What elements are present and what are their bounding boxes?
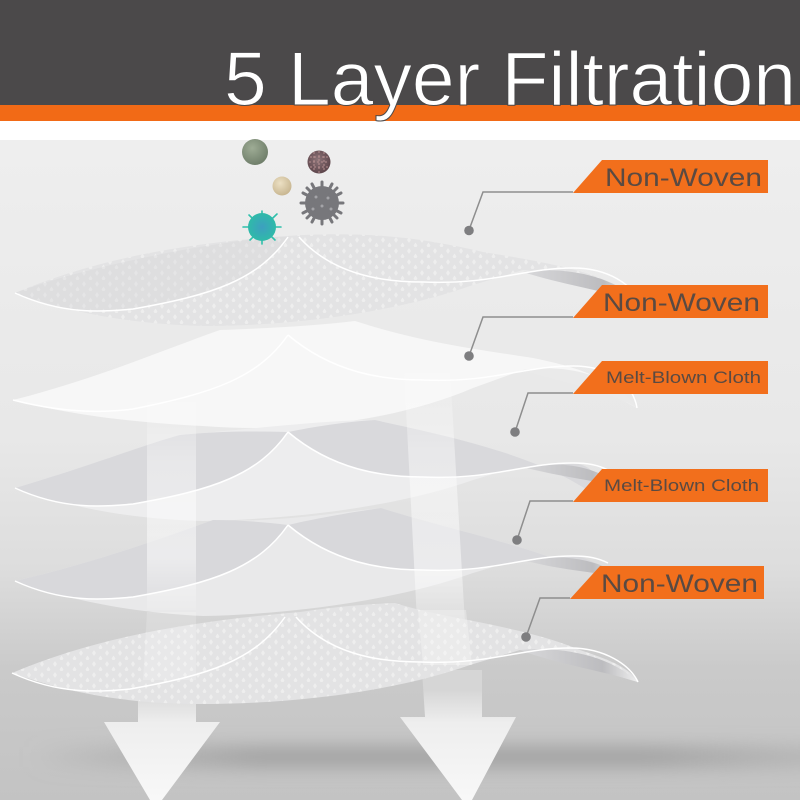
callout: non-woven 3 bbox=[521, 566, 764, 642]
callout: non-woven 1 bbox=[464, 160, 768, 235]
left down arrow bbox=[104, 690, 220, 800]
filter layer 4: melt-blown cloth bbox=[15, 508, 623, 616]
callout: melt-blown cloth 2: Melt-Blown Cloth bbox=[604, 476, 759, 495]
callout: melt-blown cloth 1 bbox=[510, 361, 768, 437]
callout: non-woven 1: Non-Woven bbox=[605, 164, 762, 192]
orange stripe bbox=[0, 105, 800, 121]
icon: grey spiked virus bbox=[301, 182, 343, 224]
callout: melt-blown cloth 1: Melt-Blown Cloth bbox=[606, 368, 761, 387]
callout: non-woven 2: Non-Woven bbox=[603, 289, 760, 317]
icon: teal virus bbox=[243, 211, 281, 244]
filter layer 5: non-woven bbox=[12, 603, 638, 704]
icon: beige particle bbox=[272, 176, 292, 196]
callout: non-woven 2 bbox=[464, 285, 768, 361]
filter layer 3: melt-blown cloth bbox=[15, 420, 623, 521]
header band bbox=[0, 0, 800, 105]
filter layer 1: non-woven bbox=[15, 234, 639, 326]
white stripe bbox=[0, 121, 800, 140]
filter layer 2: non-woven white bbox=[13, 321, 637, 428]
callout: non-woven 3: Non-Woven bbox=[601, 570, 758, 598]
right airflow column bbox=[404, 370, 466, 640]
left airflow column over layer 5 bbox=[143, 612, 196, 680]
left airflow column bbox=[147, 400, 196, 610]
callout: melt-blown cloth 2 bbox=[512, 469, 768, 545]
right airflow column over layer 5 bbox=[418, 610, 472, 665]
icon: red-brown virus bbox=[308, 150, 330, 174]
icon: green particle bbox=[242, 139, 268, 165]
floor shadow bbox=[30, 747, 800, 767]
title: 5 Layer Filtration bbox=[224, 37, 796, 122]
right down arrow bbox=[400, 670, 516, 800]
